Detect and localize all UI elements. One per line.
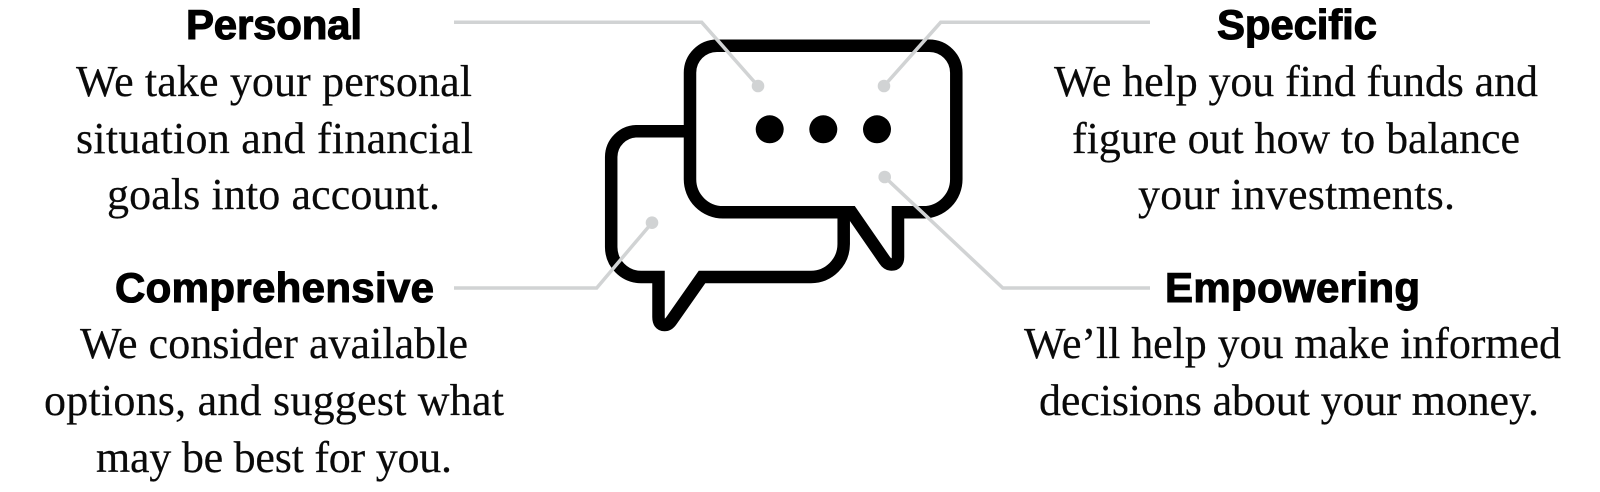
description: Specific: figure out how to balance (1072, 114, 1520, 163)
description: Comprehensive: options, and suggest what (44, 376, 504, 425)
description: Specific: We help you find funds and (1054, 57, 1538, 106)
connector: Empowering (878, 171, 1150, 288)
description: Empowering: We’ll help you make informed (1024, 319, 1561, 368)
heading: Specific: Specific (1217, 1, 1377, 48)
description: Comprehensive: may be best for you. (96, 433, 452, 482)
description: Personal: We take your personal (76, 57, 472, 106)
front speech bubble (690, 46, 956, 265)
description: Specific: your investments. (1138, 170, 1455, 219)
connector: Comprehensive (454, 216, 658, 288)
text block: Comprehensive (44, 264, 504, 482)
description: Personal: goals into account. (107, 170, 440, 219)
icon: speech bubbles (611, 46, 956, 325)
icon: three dots (756, 115, 891, 143)
description: Comprehensive: We consider available (80, 319, 468, 368)
description: Comprehensive (44, 319, 504, 482)
description: Specific (1054, 57, 1538, 219)
description: Personal (76, 57, 473, 219)
heading: Personal: Personal (186, 1, 362, 48)
text block: Personal (76, 1, 473, 219)
back speech bubble (611, 131, 844, 325)
description: Empowering (1024, 319, 1561, 425)
description: Personal: situation and financial (76, 114, 473, 163)
connector: Personal (454, 22, 764, 92)
heading: Comprehensive: Comprehensive (115, 264, 434, 311)
connector: Specific (878, 22, 1150, 92)
heading: Empowering: Empowering (1165, 264, 1420, 311)
text block: Specific (1054, 1, 1538, 219)
description: Empowering: decisions about your money. (1039, 376, 1539, 425)
text block: Empowering (1024, 264, 1561, 425)
